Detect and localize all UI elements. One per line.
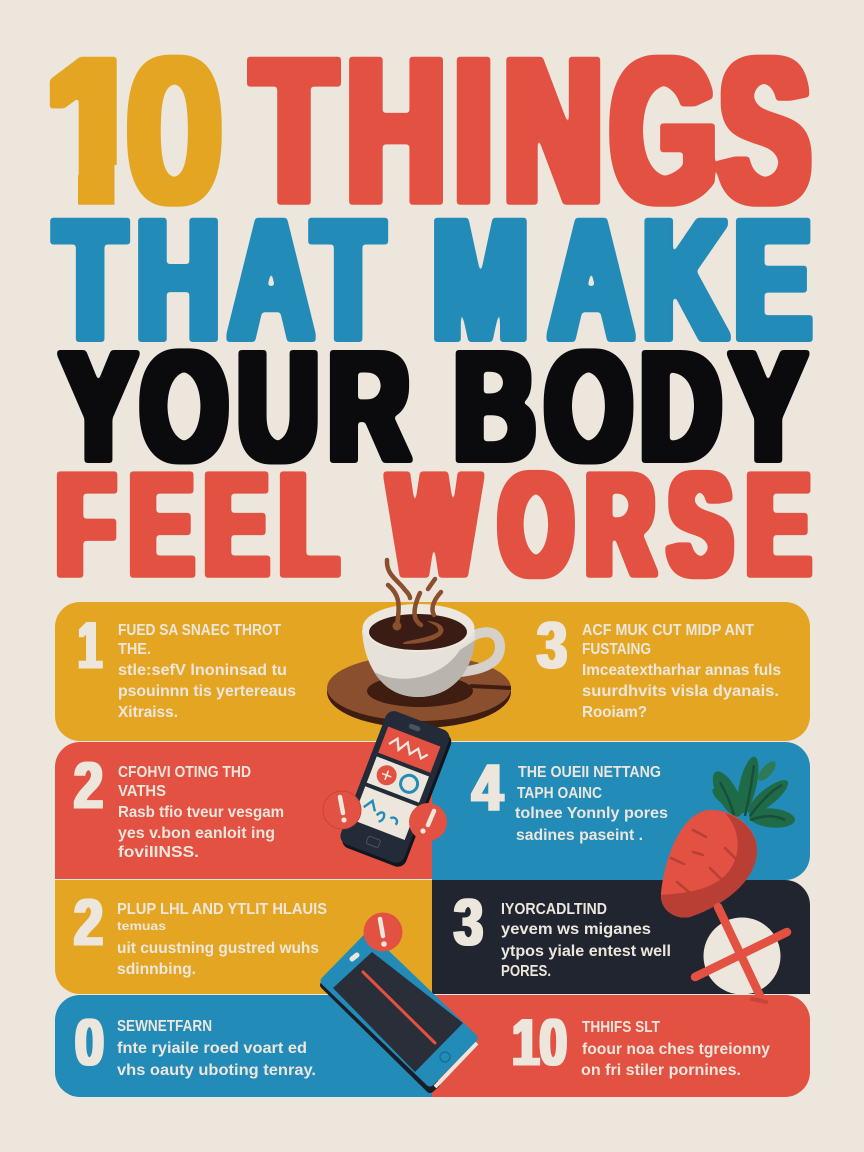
panel: row 4 left blue — [55, 995, 432, 1097]
item 6 text: IYORCADLTIND — [501, 901, 607, 918]
title line 1: 10 — [30, 16, 225, 245]
item 4 — [472, 750, 668, 844]
item 5 text: sdinnbing. — [117, 961, 196, 978]
phone screen card circles — [367, 756, 429, 803]
item 2 text: foviIINSS. — [118, 844, 199, 861]
icon: carrot — [661, 755, 796, 918]
phone screen card text — [352, 786, 418, 840]
panel: row 1 yellow band — [55, 602, 810, 741]
number 10: 10 — [512, 1005, 567, 1079]
number 3: 3 — [537, 608, 567, 682]
panel: row 3 right dark — [432, 880, 810, 994]
panel: row 2 right blue — [432, 742, 810, 880]
item 7 text: SEWNETFARN — [117, 1018, 212, 1035]
title line 4: FEEL WORSE — [0, 443, 809, 606]
title line 1: 10: 0 — [124, 16, 225, 245]
icon: crossed circle — [695, 907, 787, 1002]
steam — [387, 560, 441, 625]
number 1: 1 — [78, 608, 102, 682]
number 4: 4 — [472, 750, 503, 824]
item 1 text: FUED SA SNAEC THROT — [118, 622, 281, 639]
item 5 text: temuas — [117, 919, 166, 933]
phone shadow edge — [324, 980, 436, 1089]
item 6 text: ytpos yiale entest well — [501, 943, 671, 960]
cup shading — [374, 640, 475, 697]
item 3 — [537, 608, 781, 721]
phone body — [325, 937, 473, 1082]
item 2 — [74, 748, 284, 861]
cup handle — [460, 632, 500, 672]
carrot marks — [671, 830, 743, 909]
item 1 text — [118, 622, 296, 721]
saucer — [327, 655, 511, 728]
item 3 text: ACF MUK CUT MIDP ANT — [582, 622, 754, 639]
item 10 text: THHIFS SLT — [582, 1019, 660, 1036]
phone speaker — [352, 955, 357, 959]
alert badge — [364, 912, 402, 952]
phone screen card red — [378, 727, 440, 773]
item 7 text — [117, 1018, 316, 1079]
number 2: 2 — [74, 748, 103, 822]
phone beige edge — [435, 1043, 477, 1087]
item 2 text: CFOHVI OTING THD — [118, 764, 251, 781]
red line — [363, 972, 435, 1043]
title line 3: YOUR BODY — [0, 319, 805, 494]
item 3 text: FUSTAING — [582, 641, 651, 658]
panel: row 2 left red — [55, 742, 432, 879]
item 5 text: PLUP LHL AND YTLIT HLAUIS — [117, 901, 327, 918]
item 4 text: sadines paseint . — [516, 827, 643, 844]
cup body — [362, 630, 475, 697]
panel: row 4 right red — [432, 995, 810, 1097]
title — [0, 16, 811, 606]
icon: tilted phone — [324, 912, 477, 1089]
item 4 text: TAPH OAINC — [517, 785, 602, 802]
item 7 — [75, 1005, 316, 1079]
item 4 text: THE OUEII NETTANG — [518, 764, 661, 781]
item 7 text: vhs oauty uboting tenray. — [117, 1062, 316, 1079]
item 1 text: stle:sefV lnoninsad tu — [118, 662, 287, 679]
item 7 text: fnte ryiaile roed voart ed — [117, 1040, 307, 1057]
item 10 text: on fri stiler pornines. — [581, 1062, 741, 1079]
item 3 text — [582, 622, 781, 721]
item 4 text: tolnee Yonnly pores — [515, 805, 668, 822]
icon: coffee cup on saucer — [327, 560, 511, 728]
item 3 text: Imceatextharhar annas fuls — [582, 662, 781, 679]
item 2 text: yes v.bon eanloit ing — [118, 825, 275, 842]
carrot leaves — [707, 755, 796, 829]
carrot body — [661, 810, 757, 918]
phone body — [337, 709, 455, 869]
item 2 text: Rasb tfio tveur vesgam — [118, 804, 284, 821]
item 6 text — [501, 901, 671, 980]
item 2 text — [118, 764, 284, 861]
number 0: 0 — [75, 1005, 104, 1079]
item 4 text — [515, 764, 668, 844]
item 6 text: PORES. — [501, 963, 551, 980]
cup rim — [362, 604, 474, 652]
title line 2: THAT MAKE — [0, 185, 811, 374]
title line 1: things: THINGS — [252, 16, 810, 245]
item 1 — [78, 608, 296, 721]
icon: phone with alerts — [323, 709, 455, 869]
number 2 second: 2 — [74, 885, 103, 959]
item 10 text — [581, 1019, 770, 1079]
alert right — [409, 803, 447, 841]
item 1 text: psouinnn tis yertereaus — [118, 683, 296, 700]
item 10 text: foour noa ches tgreionny — [582, 1041, 770, 1058]
title line 1: 10: 1 — [45, 16, 142, 245]
item 3 text: suurdhvits visla dyanais. — [582, 683, 779, 700]
item 1 text: Xitraiss. — [118, 704, 178, 721]
item 6 — [454, 885, 671, 980]
item 5 — [74, 885, 327, 978]
item 3 text: Rooiam? — [582, 704, 647, 721]
phone screen — [333, 952, 463, 1072]
phone home button — [440, 1052, 450, 1062]
alert left — [323, 791, 361, 829]
item 10 — [512, 1005, 770, 1079]
carrot shade — [661, 813, 757, 918]
item 5 text: uit cuustning gustred wuhs — [117, 940, 319, 957]
number 3 second: 3 — [454, 885, 483, 959]
item 1 text: THE. — [118, 641, 151, 658]
item 5 text — [117, 901, 327, 978]
coffee — [369, 614, 467, 650]
item 6 text: yevem ws miganes — [501, 921, 651, 938]
panel: row 3 left yellow — [55, 880, 432, 994]
item 2 text: VATHS — [118, 783, 166, 800]
